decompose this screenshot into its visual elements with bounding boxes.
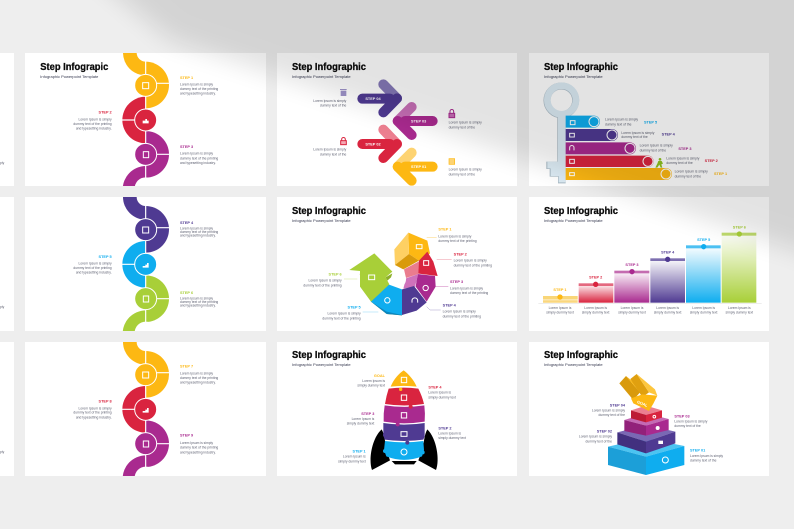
- text: step 5: [605, 118, 658, 126]
- panel: cropped left column, row 2: ply: [0, 305, 5, 309]
- bar captions: simply dummy text: [582, 311, 610, 315]
- bar captions: simply dummy text: [690, 311, 718, 315]
- arrow: step 04: STEP 04: [365, 97, 381, 101]
- text: step 2: [438, 427, 466, 440]
- step texts: Lorem Ipsum is simply: [180, 152, 213, 156]
- text: step 3: [347, 412, 375, 426]
- step texts: Lorem Ipsum is simply: [79, 261, 112, 265]
- text: step 04: [313, 99, 347, 108]
- text: step 01: Lorem Ipsum is simply: [690, 454, 723, 458]
- heading: Step Infographic: [544, 205, 618, 217]
- text: step 4: [621, 131, 676, 139]
- panel: pyramid: [529, 342, 769, 476]
- text: goal: simply dummy text: [357, 384, 385, 388]
- step texts: and typesetting industry.: [76, 271, 112, 275]
- text: step 3: Lorem Ipsum is: [352, 417, 375, 421]
- text: step 3: STEP 3: [678, 147, 691, 151]
- panel: cropped left column, row 2: [0, 197, 14, 331]
- step texts: Lorem Ipsum is simply: [180, 371, 213, 375]
- subtitle: Infographic Powerpoint Template: [292, 218, 351, 223]
- spiral arrow chart: [349, 233, 438, 315]
- text: step 1: [338, 449, 367, 463]
- text: step 01: dummy text of the: [449, 172, 475, 176]
- text: step 04: STEP 04: [610, 403, 626, 407]
- bar: step 4: STEP 4: [661, 250, 675, 254]
- step texts: [73, 221, 218, 307]
- icon: lock magenta: [449, 109, 455, 118]
- text: step 01: [449, 168, 482, 176]
- step texts: dummy text of the printing: [180, 376, 218, 380]
- icon: green runner: [655, 158, 663, 168]
- bar captions: Lorem Ipsum is: [692, 306, 715, 310]
- text: step 2: Lorem Ipsum is: [438, 431, 461, 435]
- text: step 6: STEP 6: [329, 272, 342, 276]
- connector lines: [344, 238, 452, 312]
- bar: step 4: [650, 250, 685, 303]
- text: step 1: [438, 228, 477, 243]
- text: step 01: [690, 449, 723, 463]
- text: step 1: STEP 1: [714, 172, 728, 176]
- text: step 6: [303, 272, 342, 287]
- text: step 02: [579, 429, 612, 443]
- arrow: step 03: STEP 03: [411, 120, 426, 124]
- serpentine chart: [122, 197, 169, 331]
- text: step 03: [674, 414, 708, 428]
- text: step 04: [592, 403, 626, 417]
- text: step 4: Lorem Ipsum is simply: [443, 310, 476, 314]
- bar: step 5: [566, 116, 600, 128]
- text: step 03: dummy text of the: [674, 424, 701, 428]
- text: step 1: STEP 1: [438, 228, 452, 232]
- text: step 5: [322, 306, 362, 320]
- text: step 1: dummy text of the: [675, 174, 701, 178]
- text: step 1: Lorem Ipsum is: [343, 455, 366, 459]
- step texts: and typesetting industry.: [180, 303, 216, 307]
- arrow: step 03: [398, 107, 433, 135]
- bar captions: simply dummy text: [654, 311, 682, 315]
- text: step 3: STEP 3: [450, 280, 463, 284]
- goal box: GOAL: [636, 400, 649, 408]
- step texts: dummy text of the printing: [180, 156, 218, 160]
- text: step 3: [640, 144, 691, 152]
- arrow: step 02: STEP 02: [365, 142, 381, 146]
- panel: rising bars: [529, 197, 769, 331]
- step texts: and typesetting industry.: [76, 127, 112, 131]
- arrow: step 01: STEP 01: [411, 165, 427, 169]
- step texts: and typesetting industry.: [180, 233, 216, 237]
- bar: step 3: [614, 263, 649, 303]
- key illustration: [546, 86, 576, 183]
- text: step 04: dummy text of the: [599, 413, 625, 417]
- text: step 4: STEP 4: [662, 133, 676, 137]
- panel: cropped left column, row 3: ply: [0, 450, 5, 454]
- subtitle: Infographic Powerpoint Template: [292, 362, 351, 367]
- step texts: STEP 5: [99, 255, 113, 259]
- step texts: Lorem Ipsum is simply: [79, 406, 112, 410]
- step texts: dummy text of the printing: [73, 266, 112, 270]
- step texts: [73, 76, 218, 165]
- text: step 5: STEP 5: [348, 306, 362, 310]
- bar captions: Lorem Ipsum is: [728, 306, 751, 310]
- bar: step 1: [543, 288, 578, 303]
- step texts: dummy text of the printing: [180, 230, 218, 234]
- panel: cropped left column, row 3: [0, 342, 14, 476]
- text: step 2: STEP 2: [438, 427, 451, 431]
- text: step 2: STEP 2: [454, 252, 467, 256]
- text: step 4: Lorem Ipsum is: [428, 391, 451, 395]
- text: step 2: [454, 252, 492, 267]
- text: step 02: Lorem Ipsum is simply: [313, 148, 347, 152]
- text: step 1: Lorem Ipsum is simply: [675, 170, 708, 174]
- text: step 6: Lorem Ipsum is simply: [309, 279, 342, 283]
- step texts: and typesetting industry.: [180, 91, 216, 95]
- step texts: dummy text of the printing: [73, 411, 112, 415]
- panel: serpentine steps 1 to 3: [25, 53, 266, 186]
- step texts: Lorem Ipsum is simply: [180, 297, 213, 301]
- text: step 02: dummy text of the: [320, 152, 346, 156]
- bar: step 6: STEP 6: [733, 226, 746, 230]
- serpentine chart: [122, 53, 169, 186]
- text: step 3: dummy text of the printing: [450, 291, 488, 295]
- panel: key steps: [529, 53, 769, 186]
- panel: cropped left column, row 1: [0, 53, 14, 186]
- step texts: STEP 7: [180, 364, 193, 368]
- subtitle: Infographic Powerpoint Template: [292, 74, 351, 79]
- text: step 3: simply dummy text: [347, 422, 374, 426]
- text: goal: [357, 374, 386, 388]
- bar: step 1: [566, 168, 672, 180]
- step texts: STEP 3: [180, 145, 193, 149]
- text: step 5: Lorem Ipsum is simply: [605, 118, 638, 122]
- panel: cropped left column, row 1: ply: [0, 161, 5, 165]
- step texts: and typesetting industry.: [180, 161, 216, 165]
- bar: step 6: [722, 226, 756, 303]
- text: step 3: dummy text of the: [640, 148, 666, 152]
- step texts: STEP 8: [99, 400, 113, 404]
- text: step 01: STEP 01: [690, 449, 706, 453]
- step texts: and typesetting industry.: [180, 450, 216, 454]
- step texts: and typesetting industry.: [76, 415, 112, 419]
- heading: Step Infographic: [544, 349, 618, 361]
- text: step 03: Lorem Ipsum is simply: [674, 420, 708, 424]
- text: step 4: dummy text of the printing: [443, 314, 481, 318]
- heading: Step Infographic: [544, 61, 618, 73]
- text: goal: Lorem Ipsum is: [362, 379, 385, 383]
- text: step 2: dummy text of the: [666, 161, 693, 165]
- subtitle: Infographic Powerpoint Template: [40, 74, 98, 79]
- arrow: step 04: [362, 84, 397, 112]
- text: step 02: dummy text of the: [586, 439, 612, 443]
- text: step 1: dummy text of the printing: [438, 239, 477, 243]
- bar captions: simply dummy text: [726, 311, 753, 315]
- icon: lock red: [341, 137, 346, 145]
- heading: Step Infographic: [292, 61, 366, 73]
- icon: trash: [340, 89, 347, 96]
- step texts: [73, 364, 218, 454]
- bar captions: Lorem Ipsum is: [584, 306, 607, 310]
- bar: step 5: [686, 238, 721, 303]
- text: step 3: STEP 3: [361, 412, 374, 416]
- text: step 2: STEP 2: [705, 159, 718, 163]
- step texts: Lorem Ipsum is simply: [180, 441, 213, 445]
- bar captions: simply dummy text: [546, 311, 574, 315]
- text: step 6: dummy text of the printing: [303, 283, 342, 287]
- text: step 04: Lorem Ipsum is simply: [592, 409, 625, 413]
- text: step 1: [675, 170, 728, 178]
- text: step 2: [666, 156, 718, 165]
- bar captions: simply dummy text: [618, 311, 646, 315]
- step texts: STEP 9: [180, 434, 193, 438]
- text: step 1: simply dummy text: [338, 459, 366, 463]
- text: step 3: [450, 280, 488, 295]
- bar captions: [546, 306, 753, 315]
- text: step 03: Lorem Ipsum is simply: [449, 121, 482, 125]
- text: step 1: Lorem Ipsum is simply: [438, 234, 472, 238]
- text: step 2: simply dummy text: [438, 436, 466, 440]
- step texts: STEP 1: [180, 76, 194, 80]
- text: step 4: [443, 303, 481, 318]
- text: goal: GOAL: [374, 374, 386, 378]
- bar: step 3: [566, 142, 636, 154]
- bar captions: Lorem Ipsum is: [549, 306, 572, 310]
- text: step 5: Lorem Ipsum is simply: [328, 312, 361, 316]
- text: step 5: dummy text of the: [605, 122, 632, 126]
- serpentine chart: [122, 342, 169, 476]
- text: step 04: dummy text of the: [320, 104, 346, 108]
- text: step 3: Lorem Ipsum is simply: [450, 286, 483, 290]
- step texts: dummy text of the printing: [180, 300, 218, 304]
- pyramid illustration: [608, 406, 684, 475]
- text: step 03: dummy text of the: [449, 125, 475, 129]
- text: step 2: Lorem Ipsum is simply: [666, 156, 700, 160]
- bar: step 3: STEP 3: [625, 263, 639, 267]
- bar: step 5: STEP 5: [697, 238, 711, 242]
- text: step 4: STEP 4: [428, 386, 442, 390]
- bar: step 2: [579, 275, 613, 303]
- goal box: [619, 374, 657, 411]
- panel: 3D spiral arrow: [277, 197, 517, 331]
- panel: serpentine steps 4 to 6: [25, 197, 266, 331]
- step texts: dummy text of the printing: [180, 87, 218, 91]
- text: step 5: STEP 5: [644, 120, 658, 124]
- arrow: step 01: [398, 153, 433, 181]
- step texts: dummy text of the printing: [180, 446, 218, 450]
- subtitle: Infographic Powerpoint Template: [544, 362, 603, 367]
- text: step 3: Lorem Ipsum is simply: [640, 144, 673, 148]
- arrow: step 02: [362, 130, 397, 158]
- text: step 4: dummy text of the: [621, 135, 648, 139]
- rocket illustration: [371, 370, 438, 470]
- bar: step 2: STEP 2: [589, 275, 602, 279]
- step texts: STEP 4: [180, 221, 194, 225]
- text: step 4: Lorem Ipsum is simply: [621, 131, 655, 135]
- text: step 4: STEP 4: [443, 303, 457, 307]
- text: step 01: Lorem Ipsum is simply: [449, 168, 482, 172]
- text: step 4: [428, 386, 456, 399]
- text: step 02: [313, 148, 347, 156]
- bar captions: Lorem Ipsum is: [621, 306, 644, 310]
- step texts: and typesetting industry.: [180, 380, 216, 384]
- text: step 5: dummy text of the printing: [322, 316, 361, 320]
- text: step 2: Lorem Ipsum is simply: [454, 259, 487, 263]
- bar: step 4: [566, 129, 618, 141]
- step texts: dummy text of the printing: [73, 122, 112, 126]
- heading: Step Infograpic: [40, 61, 108, 73]
- bar captions: Lorem Ipsum is: [656, 306, 679, 310]
- panel: arrows: [277, 53, 517, 186]
- step texts: STEP 6: [180, 291, 193, 295]
- bar: step 2: [566, 156, 654, 167]
- panel: rocket: [277, 342, 517, 476]
- text: step 01: dummy text of the: [690, 459, 717, 463]
- step texts: Lorem Ipsum is simply: [79, 117, 112, 121]
- text: step 03: STEP 03: [674, 414, 690, 418]
- heading: Step Infographic: [292, 205, 366, 217]
- text: step 04: Lorem Ipsum is simply: [313, 99, 347, 103]
- panel: serpentine steps 7 to 9: [25, 342, 266, 476]
- subtitle: Infographic Powerpoint Template: [544, 218, 603, 223]
- text: step 4: simply dummy text: [428, 395, 456, 399]
- step texts: Lorem Ipsum is simply: [180, 227, 213, 231]
- step texts: Lorem Ipsum is simply: [180, 82, 213, 86]
- icon: clipboard: [449, 159, 455, 164]
- text: step 02: STEP 02: [597, 429, 612, 433]
- text: step 1: STEP 1: [353, 449, 367, 453]
- step texts: STEP 2: [99, 111, 112, 115]
- heading: Step Infographic: [292, 349, 366, 361]
- text: step 03: [449, 121, 482, 129]
- text: step 2: dummy text of the printing: [454, 263, 492, 267]
- subtitle: Infographic Powerpoint Template: [544, 74, 603, 79]
- bar: step 1: STEP 1: [553, 288, 567, 292]
- text: step 02: Lorem Ipsum is simply: [579, 435, 612, 439]
